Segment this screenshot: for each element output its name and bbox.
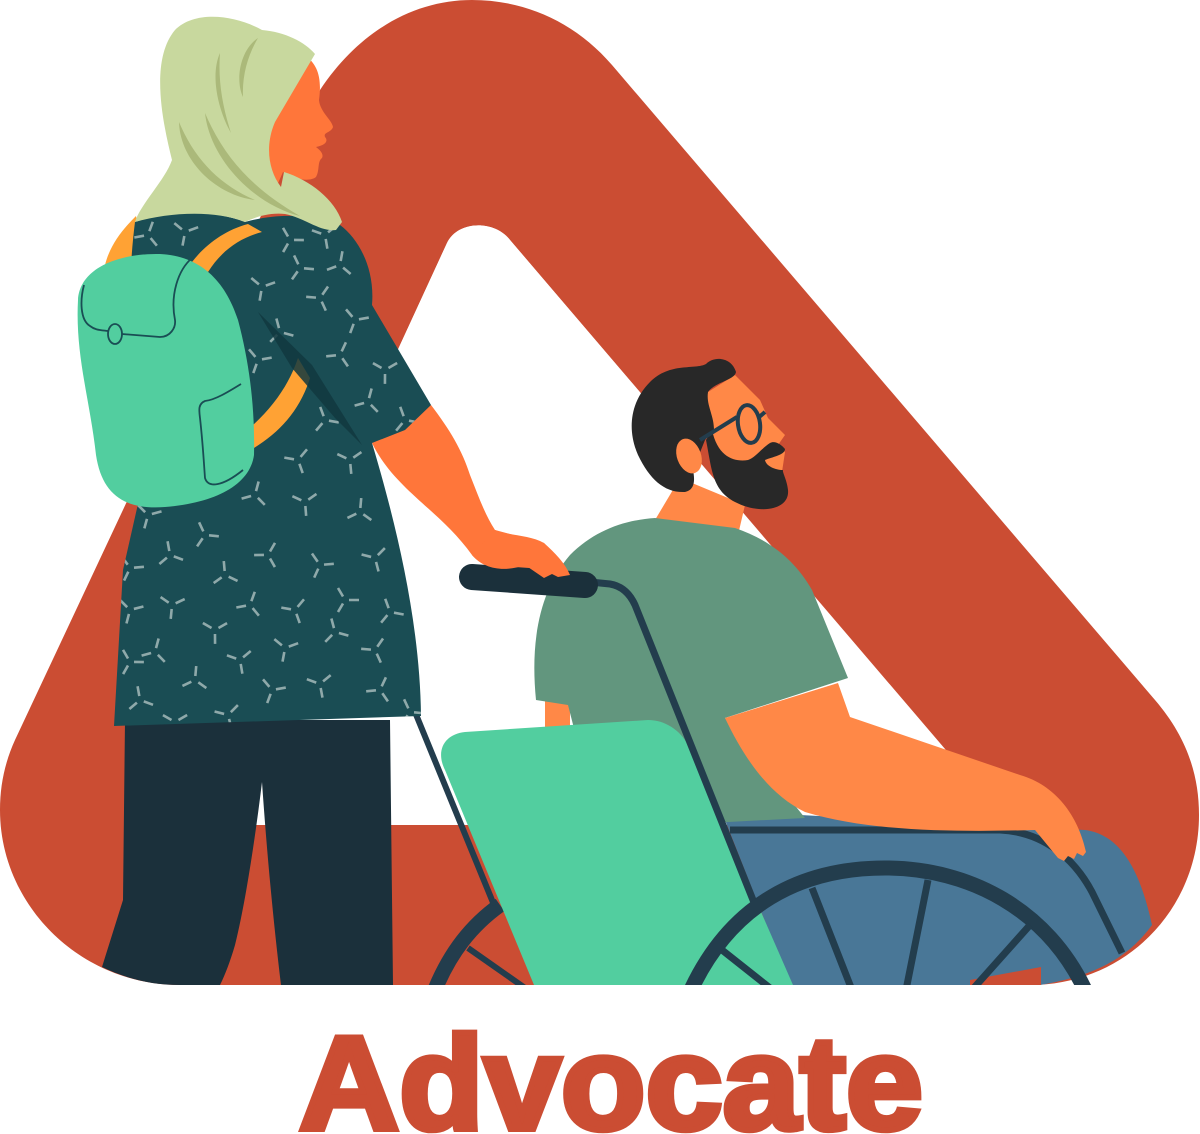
woman's tunic — [114, 213, 431, 726]
woman's hand — [472, 530, 570, 578]
man neck — [656, 484, 745, 530]
orange sash — [253, 358, 310, 448]
front wheel — [690, 868, 1086, 992]
headscarf folds — [179, 38, 300, 216]
woman's trousers — [102, 720, 393, 985]
wheelchair seat back cushion — [441, 720, 793, 985]
glasses — [700, 404, 765, 444]
man seat and legs — [725, 815, 1152, 985]
man t-shirt — [534, 518, 848, 830]
woman's arm — [372, 404, 545, 568]
orange strap right — [192, 224, 262, 272]
backpack — [78, 254, 254, 507]
tunic pattern — [112, 216, 424, 736]
man head — [632, 359, 788, 509]
tunic fold shadow — [258, 312, 362, 445]
orange strap left — [105, 216, 136, 264]
man left arm behind — [545, 701, 570, 727]
ear — [676, 438, 702, 474]
white triangle opening — [255, 225, 1010, 825]
wheelchair push frame — [590, 582, 755, 905]
beard — [706, 430, 788, 509]
headscarf — [135, 17, 342, 230]
man right arm — [725, 683, 1086, 861]
hair — [632, 359, 736, 492]
man seat frame — [730, 830, 1122, 953]
red foot plate — [970, 967, 1041, 985]
face — [706, 375, 785, 470]
wheelchair handle — [472, 577, 585, 585]
wheelchair back wheel and frame — [415, 712, 525, 992]
woman's face — [269, 60, 333, 183]
